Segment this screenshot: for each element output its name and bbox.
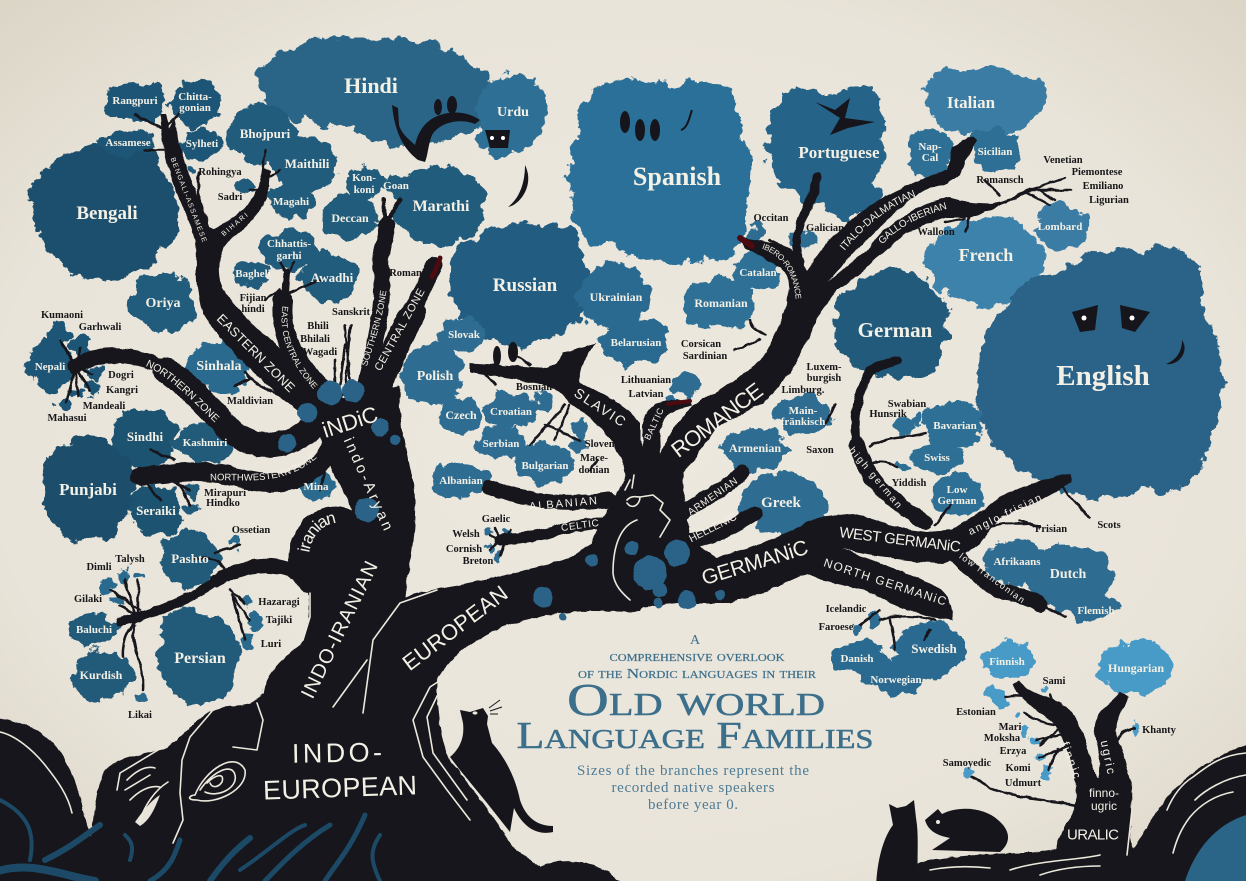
- branch labels: finno-: [1089, 786, 1119, 800]
- water strokes bottom left: [0, 800, 380, 881]
- branch labels: CELTIC: [560, 518, 600, 534]
- blob: Seraiki: [131, 484, 181, 538]
- white language labels: Portuguese: [798, 143, 880, 162]
- blob: Ossetian: [230, 538, 240, 548]
- blob: Afrikaans Dutch Flemish: [986, 538, 1118, 620]
- blob: Konkani Goan Deccan Marathi: [322, 165, 486, 245]
- black language labels: Cornish: [446, 544, 482, 555]
- title block: of the Nordic languages in their: [578, 667, 816, 682]
- white language labels: garhi: [276, 250, 302, 262]
- white language labels: Bhojpuri: [240, 126, 291, 141]
- Baltic limb: [640, 400, 692, 480]
- black language labels: Tajiki: [266, 615, 292, 626]
- black language labels: [41, 155, 1177, 789]
- black language labels: Limburg.: [782, 385, 825, 396]
- white language labels: Bavarian: [933, 420, 977, 432]
- white language labels: Maithili: [285, 156, 330, 171]
- white language labels: Polish: [417, 369, 453, 384]
- blob: Pashto: [161, 529, 219, 587]
- white language labels: Greek: [761, 495, 802, 511]
- black language labels: Bosnian: [516, 382, 552, 393]
- blob: Oriya: [129, 275, 197, 331]
- blob: Iranian small: [136, 594, 262, 705]
- black language labels: Saxon: [806, 445, 834, 456]
- branch labels: indo-Aryan: [340, 435, 396, 533]
- white language labels: Catalan: [739, 267, 777, 279]
- blob: Slovak Polish Czech: [403, 316, 486, 433]
- water bottom right: [1185, 815, 1246, 881]
- blob: Sindhi: [111, 408, 177, 468]
- subtitle: [577, 763, 809, 813]
- black language labels: Dimli: [86, 562, 112, 573]
- branch labels: EAST CENTRAL ZONE: [281, 306, 318, 389]
- white language labels: Swedish: [911, 641, 958, 656]
- white language labels: Awadhi: [311, 270, 354, 285]
- white language labels: Czech: [445, 408, 477, 422]
- white language labels: Dutch: [1050, 567, 1086, 582]
- blob: Spanish: [568, 80, 752, 265]
- branch labels: NORTH GERMANiC: [822, 556, 948, 609]
- black language labels: Dogri: [108, 370, 134, 381]
- black language labels: burgish: [807, 373, 841, 384]
- white language labels: English: [1056, 360, 1150, 392]
- blob: Armenian: [721, 428, 787, 470]
- branch labels: high german: [846, 445, 904, 511]
- branch labels: SOUTHERN ZONE: [362, 290, 386, 366]
- white language labels: Croatian: [490, 406, 532, 418]
- blob: Albanian: [433, 462, 489, 498]
- branch labels: ROMANCE: [666, 378, 768, 462]
- white language labels: Bagheli: [235, 268, 271, 280]
- white language labels: Urdu: [497, 105, 529, 120]
- white language labels: Swiss: [924, 452, 951, 464]
- cat at the trunk: [450, 700, 553, 833]
- black language labels: Lithuanian: [621, 375, 671, 386]
- birds on Hindi: [392, 96, 480, 162]
- blob: Rangpuri Chittagonian: [105, 79, 221, 127]
- white language labels: [35, 73, 1164, 686]
- black language labels: Romani: [389, 268, 425, 279]
- bark highlights: [0, 475, 1246, 875]
- branch: Central zone top: [405, 265, 434, 325]
- branch: Portuguese twig: [796, 177, 817, 262]
- black language labels: Khanty: [1142, 725, 1177, 736]
- Indic and central ink blots: [278, 380, 725, 621]
- branch labels: CENTRAL ZONE: [372, 287, 428, 373]
- white language labels: Nepali: [35, 361, 65, 373]
- blob: Gaelic and Celtic: [485, 525, 514, 561]
- black language labels: Erzya: [1000, 746, 1027, 757]
- white language labels: Magahi: [273, 196, 309, 208]
- white language labels: Slovak: [448, 329, 481, 341]
- branch labels: low franconian: [958, 551, 1026, 605]
- white language labels: Italian: [947, 93, 996, 112]
- white language labels: Ukrainian: [590, 290, 643, 304]
- branch labels: BALTIC: [642, 406, 666, 442]
- white language labels: Finnish: [989, 656, 1025, 668]
- white language labels: Kon-: [352, 172, 376, 184]
- bird on Portuguese: [815, 98, 875, 135]
- title block: Old world: [567, 674, 825, 725]
- blob: Dimli Talysh Gilaki: [100, 569, 144, 606]
- subtitle: recorded native speakers: [612, 780, 775, 796]
- white language labels: gonian: [179, 102, 211, 114]
- black language labels: Bhilali: [300, 334, 330, 345]
- branch: East Central zone: [282, 300, 332, 400]
- branch labels: ARMENIAN: [686, 476, 740, 518]
- white language labels: Spanish: [633, 162, 722, 191]
- black language labels: Sami: [1043, 676, 1065, 687]
- black language labels: Ligurian: [1089, 195, 1129, 206]
- branch labels: EUROPEAN: [263, 770, 417, 806]
- white language labels: Nap-: [918, 141, 942, 153]
- title block: [516, 633, 874, 757]
- branch: Armenian: [680, 472, 742, 515]
- blob: German: [834, 270, 950, 380]
- branch labels: URALIC: [1067, 826, 1119, 844]
- black language labels: Faroese: [819, 622, 854, 633]
- branch labels: ITALO-DALMATIAN: [840, 190, 916, 250]
- title block: Language Families: [516, 715, 874, 757]
- blob: French: [927, 216, 1043, 304]
- white language labels: Marathi: [413, 198, 470, 215]
- black language labels: Moksha: [984, 733, 1021, 744]
- black language labels: Komi: [1005, 763, 1031, 774]
- blob: Nap-Cal and Sicilian: [908, 126, 1022, 178]
- blob: Danish Swedish Norwegian: [830, 622, 966, 693]
- birds on Spanish: [620, 111, 660, 141]
- black language labels: hindi: [241, 304, 265, 315]
- white language labels: koni: [354, 184, 374, 196]
- branch: Marathi fork: [383, 200, 400, 225]
- tail on Spanish: [681, 110, 692, 130]
- blob: Assamese Sylheti: [100, 128, 223, 162]
- dark red branch tips: [432, 238, 752, 404]
- white language labels: Bengali: [76, 203, 138, 224]
- blob: Urdu: [477, 74, 547, 156]
- branch: Iranian thick part: [217, 566, 310, 580]
- branch labels: NORTHERN ZONE: [146, 360, 220, 422]
- blob: Baltic: [666, 370, 701, 405]
- white language labels: Oriya: [146, 296, 180, 311]
- black language labels: Yiddish: [892, 478, 926, 489]
- black language labels: Fijian: [240, 293, 267, 304]
- branch: Eastern zone to Bengali-Assamese and Bihari: [160, 115, 345, 412]
- black language labels: Piemontese: [1072, 167, 1123, 178]
- branch labels: BENGALI-ASSAMESE: [169, 157, 208, 244]
- ground right mound: [860, 847, 1135, 881]
- white language labels: Belarusian: [611, 337, 661, 349]
- black language labels: Hindko: [206, 498, 240, 509]
- branch labels: iNDiC: [319, 401, 381, 443]
- white language labels: Rangpuri: [112, 95, 158, 107]
- white language labels: Danish: [840, 653, 874, 665]
- blob: Finnish: [982, 642, 1034, 680]
- white language labels: Albanian: [439, 475, 483, 487]
- black language labels: Hazaragi: [258, 597, 300, 608]
- blob: Bhojpuri Maithili Magahi: [189, 105, 337, 218]
- white language labels: Russian: [493, 275, 558, 296]
- blob: Croatian Serbian Bulgarian Slovene: [476, 392, 592, 483]
- black language labels: Likai: [128, 710, 152, 721]
- white language labels: Serbian: [483, 438, 519, 450]
- black language labels: Kangri: [106, 385, 138, 396]
- branch labels: WEST GERMANiC: [838, 524, 962, 556]
- branch labels: ALBANIAN: [529, 495, 597, 513]
- black language labels: Walloon: [917, 227, 955, 238]
- black language labels: Mahasui: [47, 413, 87, 424]
- blob: Chhattisgarhi Awadhi Bagheli: [233, 230, 360, 302]
- blob: Lombard: [1034, 205, 1088, 249]
- black language labels: Talysh: [115, 554, 145, 565]
- black language labels: Samoyedic: [943, 758, 992, 769]
- white language labels: Bulgarian: [521, 460, 569, 472]
- branch: Central zone: [375, 313, 413, 395]
- branch labels: INDO-: [292, 737, 382, 769]
- blob: Belarusian: [602, 320, 670, 364]
- ground left: [0, 718, 120, 881]
- black language labels: Udmurt: [1005, 778, 1042, 789]
- black language labels: Slovene: [585, 439, 620, 450]
- branch: Hellenic: [680, 513, 755, 540]
- birds on Russian: [493, 342, 518, 366]
- white language labels: Armenian: [729, 441, 781, 455]
- black language labels: Galician: [806, 223, 844, 234]
- branch labels: ugric: [1098, 739, 1118, 775]
- black language labels: Mace-: [580, 453, 608, 464]
- twigs: [60, 112, 1135, 805]
- branch: Celtic: [500, 523, 603, 540]
- white language labels: Punjabi: [59, 480, 117, 499]
- white language labels: French: [959, 245, 1013, 265]
- white language labels: Mina: [303, 481, 329, 493]
- black language labels: Venetian: [1043, 155, 1083, 166]
- blob: Hindi: [257, 36, 490, 147]
- blob: Main-frankisch and Limburg: [775, 394, 831, 434]
- branch: Northern zone thick part: [165, 370, 315, 445]
- branch: Albanian: [490, 487, 610, 502]
- black language labels: Welsh: [452, 529, 480, 540]
- root hollow: [135, 795, 160, 826]
- branch labels: finnic: [1058, 740, 1084, 780]
- black language labels: Swabian: [888, 399, 926, 410]
- white language labels: German: [937, 495, 977, 507]
- black language labels: Breton: [463, 556, 494, 567]
- black language labels: Icelandic: [826, 604, 867, 615]
- ground right: [1095, 740, 1246, 881]
- cat tail by Urdu: [508, 165, 528, 207]
- blob: Icelandic and Faroese: [854, 613, 881, 631]
- branch labels: EUROPEAN: [398, 580, 512, 676]
- black language labels: Sadri: [218, 192, 242, 203]
- blob: Sinhala and Maldivian: [187, 343, 249, 393]
- blob: Persian: [160, 610, 240, 704]
- white language labels: Hungarian: [1108, 661, 1164, 675]
- white language labels: Chhattis-: [267, 238, 311, 250]
- central junction and Germanic limbs: [590, 473, 1072, 620]
- tail on English: [1166, 340, 1185, 364]
- blob: Greek: [744, 471, 824, 535]
- white language labels: Sindhi: [127, 429, 163, 444]
- twigs and branches: [60, 112, 1135, 805]
- branch: East Central top: [285, 272, 287, 300]
- white language labels: Afrikaans: [993, 556, 1041, 568]
- black language labels: Bhili: [307, 321, 329, 332]
- subtitle: Sizes of the branches represent the: [577, 763, 809, 779]
- branch labels: [146, 157, 1119, 844]
- black language labels: Latvian: [628, 389, 664, 400]
- black language labels: Gilaki: [74, 594, 102, 605]
- white language labels: Lombard: [1038, 221, 1082, 233]
- title block: comprehensive overlook: [610, 650, 785, 665]
- black language labels: Mari: [999, 722, 1021, 733]
- blob: Bengali: [30, 140, 177, 280]
- branch labels: BIHARI: [220, 212, 250, 238]
- title block: A: [690, 633, 701, 648]
- branch labels: NORTHWESTERN ZONE: [210, 454, 317, 481]
- branch labels: HELLENIC: [687, 511, 739, 545]
- blob: Nepali cluster: [28, 324, 102, 411]
- blob: Mina: [296, 471, 336, 501]
- black language labels: Mirapuri: [204, 488, 246, 499]
- blob: Kashmiri: [175, 423, 235, 463]
- black language labels: Wagadi: [303, 347, 337, 358]
- branch labels: EASTERN ZONE: [214, 311, 298, 395]
- black language labels: Garhwali: [79, 322, 121, 333]
- branch labels: SLAVIC: [571, 384, 629, 430]
- black language labels: Rohingya: [198, 167, 242, 178]
- black language labels: Sardinian: [683, 351, 727, 362]
- Romance limb with Ibero-Romance, Italo-Dalmatian, Gallo-Iberian: [652, 135, 1035, 500]
- blob: Italian: [925, 68, 1045, 136]
- white language labels: Main-: [789, 405, 818, 417]
- Uralic tree: [1012, 680, 1135, 850]
- black language labels: Mandeali: [83, 401, 125, 412]
- white language labels: Goan: [383, 180, 409, 192]
- black language labels: Sanskrit: [332, 307, 370, 318]
- white language labels: Seraiki: [136, 503, 176, 518]
- branch labels: iranian: [297, 514, 336, 552]
- white language labels: Persian: [174, 650, 226, 667]
- black language labels: Occitan: [754, 213, 789, 224]
- blob: Romanian Catalan: [685, 252, 781, 330]
- branch labels: ugric: [1091, 799, 1117, 813]
- cat face in Urdu: [485, 130, 510, 148]
- white language labels: Kashmiri: [183, 437, 227, 449]
- white language labels: Sinhala: [196, 359, 242, 374]
- white language labels: Flemish: [1077, 605, 1115, 617]
- white language labels: Sicilian: [978, 146, 1012, 158]
- branch labels: INDO-IRANIAN: [297, 558, 383, 702]
- black language labels: Luri: [261, 639, 281, 650]
- Slavic limb: [470, 343, 655, 480]
- black language labels: Scots: [1097, 520, 1121, 531]
- white language labels: Cal: [922, 152, 938, 164]
- branch: Northwestern zone: [140, 448, 330, 483]
- blob: Bavarian Swiss Low German: [896, 401, 984, 515]
- blobs: other Uralic: [965, 687, 1141, 778]
- branch labels: anglo-frisian: [966, 492, 1044, 538]
- branch: High German: [855, 360, 925, 522]
- black language labels: donian: [579, 465, 610, 476]
- branch: Low Franconian: [955, 555, 1040, 605]
- blob: Hungarian: [1099, 643, 1173, 693]
- black language labels: Estonian: [956, 707, 996, 718]
- black language labels: Gaelic: [482, 514, 511, 525]
- branch: Iranian: [120, 566, 310, 622]
- cat eyes on English: [1072, 305, 1150, 332]
- black language labels: Hunsrik: [869, 409, 907, 420]
- blob: Portuguese: [765, 87, 885, 217]
- black language labels: Maldivian: [227, 396, 273, 407]
- branch: Southern zone: [363, 225, 387, 395]
- blob: English: [975, 247, 1225, 498]
- black language labels: Ossetian: [232, 525, 270, 536]
- white language labels: Pashto: [171, 551, 209, 566]
- white language labels: Assamese: [105, 137, 151, 149]
- branch: Northern zone: [75, 356, 315, 445]
- white language labels: Norwegian: [870, 674, 922, 686]
- blob: Russian and Ukrainian: [450, 223, 651, 347]
- white language labels: Low: [947, 484, 967, 496]
- subtitle: before year 0.: [648, 797, 738, 813]
- black language labels: Corsican: [681, 339, 721, 350]
- white language labels: Romanian: [694, 296, 748, 310]
- branch labels: GERMANiC: [699, 536, 811, 590]
- white language labels: Sylheti: [186, 138, 218, 150]
- black language labels: Frisian: [1035, 524, 1067, 535]
- white language labels: Kurdish: [80, 668, 123, 682]
- blob: Galician and Occitan: [748, 225, 817, 249]
- main trunk and European limb: [85, 385, 650, 881]
- black language labels: Kumaoni: [41, 310, 83, 321]
- cat left on the right hill: [876, 800, 920, 881]
- blob: Punjabi: [40, 438, 136, 542]
- black language labels: Luxem-: [806, 362, 842, 373]
- white language labels: Hindi: [344, 73, 398, 98]
- white language labels: fränkisch: [781, 416, 825, 428]
- blob: Mirapuri Hindko: [184, 482, 198, 515]
- black language labels: Emiliano: [1083, 181, 1123, 192]
- branch: High German thick part: [857, 445, 925, 522]
- cat right on the right hill: [925, 809, 1008, 852]
- white language labels: Chitta-: [178, 91, 212, 103]
- white language labels: Deccan: [331, 211, 369, 225]
- black language labels: Romansch: [976, 175, 1024, 186]
- branch labels: IBERO-ROMANCE: [762, 244, 802, 299]
- blob: Baluchi Kurdish: [71, 612, 132, 700]
- white language labels: Baluchi: [76, 624, 112, 636]
- branch labels: GALLO-IBERIAN: [879, 202, 946, 243]
- white language labels: German: [858, 318, 933, 342]
